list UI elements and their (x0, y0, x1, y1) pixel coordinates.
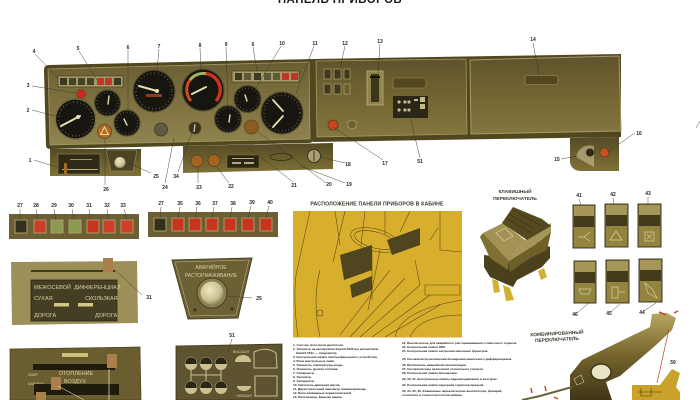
dash in perspective (340, 228, 420, 298)
gray plug (154, 123, 168, 136)
switch tile numbers: 42 (610, 192, 616, 198)
leader lines and callout numbers: 2 (27, 108, 30, 114)
switch strip: 27,35-40: 27 (158, 201, 164, 207)
illustration: rocker switch (480, 207, 551, 301)
leader lines and callout numbers: 15 (554, 157, 560, 163)
gauge: clock (261, 92, 303, 134)
switch tile numbers (572, 191, 656, 318)
panel: gear shift plate (176, 333, 282, 400)
text block: legend left column: 10. Указатель давления масла. (293, 383, 340, 387)
switch tile numbers: 44 (639, 310, 645, 316)
illustration: yellow terminal block (632, 360, 680, 400)
panel: right sub-panel (570, 137, 619, 171)
text block: legend right column: 27. Сигнализаторы включения стояночного тормоза. (402, 367, 484, 371)
icon: hazard button (98, 124, 112, 138)
switch strip: 27,35-40: 38 (230, 201, 236, 207)
switch strip: 27,35-40: 37 (212, 201, 218, 207)
slider thirteen (367, 71, 383, 105)
leader lines and callout numbers: 24 (162, 185, 168, 191)
knob eighteen (308, 150, 320, 162)
gauge: small five (94, 90, 120, 116)
leader lines and callout numbers: 18 (345, 162, 351, 168)
mark at right edge (696, 121, 700, 128)
leader lines and callout numbers: 19 (346, 182, 352, 188)
icon on rocker (496, 228, 513, 241)
switch tile 41 (573, 205, 595, 248)
lower body (484, 240, 550, 287)
text block: legend right column: отопителя и стеклоочистителя кабины. (402, 393, 463, 397)
gauge: tachometer (56, 99, 96, 139)
handle (393, 78, 426, 88)
heading: combined switch: КОМБИНИРОВАННЫЙ (530, 328, 584, 338)
text block: legend right column: 26. Включатель аварийной сигнализации. (402, 363, 467, 367)
panel: emergency release plate: РАСТОРМАЖИВАНИЕ (185, 273, 238, 279)
panel: instrument cluster (44, 59, 313, 149)
text block: legend left column: КамАЗ-5511 — спидометр). (296, 351, 337, 355)
gauge: small six (114, 110, 140, 136)
leader lines and callout numbers: 25 (153, 174, 159, 180)
heading: combined switch: ПЕРЕКЛЮЧАТЕЛЬ (535, 336, 580, 344)
text block: legend left column: 6. Указатель уровня топлива. (293, 367, 338, 371)
panel: emergency release plate: 25 (256, 296, 262, 302)
panel: differential plate: ДОРОГА (95, 313, 117, 319)
switch strip: 27-33 (9, 203, 139, 239)
illustration: combined stalk switch (522, 311, 678, 400)
heading: combined switch (530, 328, 584, 344)
panel: differential plate: СУХАЯ (34, 296, 53, 302)
switch tile 42 (605, 204, 628, 247)
panel: gear shift plate: 51 (229, 333, 235, 339)
text block: legend left column: 4. Блок контрольных ламп. (293, 359, 335, 363)
switches twelve (324, 69, 350, 94)
text block: legend right column: 25. Сигнализатор включения блокировки межосевого дифференциала. (402, 357, 512, 361)
orange knob (244, 120, 258, 134)
heading: rocker switch: ПЕРЕКЛЮЧАТЕЛЬ (493, 196, 537, 202)
leader lines and callout numbers: 16 (636, 131, 642, 137)
terminals (492, 268, 547, 301)
leader lines and callout numbers: 22 (228, 184, 234, 190)
leader lines and callout numbers (27, 37, 642, 193)
leader lines and callout numbers: 11 (312, 41, 318, 47)
panel: gear shift plate: ВЫСШАЯ (233, 350, 249, 354)
switch strip: 27-33: 30 (68, 203, 74, 209)
leader lines and callout numbers: 9 (225, 42, 228, 48)
rocker light face (483, 223, 525, 260)
panel: differential plate: 31 (146, 295, 152, 301)
text block: legend left column: 1. Счетчик моточасов двигателя. (293, 343, 344, 347)
leader lines and callout numbers: 14 (530, 37, 536, 43)
text block: legend left column: 8. Тахометр. (293, 375, 312, 379)
latch (270, 154, 292, 160)
panel: emergency release plate: АВАРИЙНОЕ (195, 263, 227, 271)
text block: legend left column (293, 343, 379, 399)
ignition key (189, 122, 201, 134)
text block: legend right column (402, 341, 517, 397)
icon: red warning lamp (76, 89, 86, 99)
gauge: ten (234, 86, 261, 112)
switch strip: 27-33: 31 (86, 203, 92, 209)
text block: legend left column: 7. Спидометр. (293, 371, 315, 375)
leader lines and callout numbers: 20 (326, 182, 332, 188)
rocker dark ribbed face (502, 207, 551, 240)
text block: legend left column: 11. Двухстрелочный манометр пневмопривода. (293, 387, 367, 391)
switch tile numbers: 43 (645, 191, 651, 197)
gauge: colored dial (182, 69, 224, 111)
text block: legend left column: 13. Пепельница. Крышка ящика. (293, 395, 342, 399)
illustration: yellow terminal block: 59 (670, 360, 676, 366)
gauge: speedometer (133, 70, 175, 112)
panel: heating plate: ЗАКР (28, 372, 38, 377)
switch strip: left (58, 76, 123, 87)
leader lines and callout numbers: 23 (196, 185, 202, 191)
leader lines and callout numbers: 1 (29, 158, 32, 164)
switch tile 43 (638, 204, 661, 247)
switch tile numbers: 41 (576, 193, 582, 199)
text block: legend right column: 23. Контрольная лампа ЭФУ. (402, 345, 446, 349)
panel: heating plate (10, 347, 141, 400)
text block: legend right column: 32. Контрольная лампа перегрева тормозов прицепа. (402, 383, 484, 387)
leader lines and callout numbers: 13 (377, 39, 383, 45)
switch strip: 27,35-40: 36 (195, 201, 201, 207)
text block: legend left column: 9. Амперметр. (293, 379, 315, 383)
switch strip: 27,35-40 (148, 200, 278, 237)
leader lines and callout numbers: 10 (279, 41, 285, 47)
switch strip: 27,35-40: 35 (177, 201, 183, 207)
text block: legend left column: 5. Указатель температуры воды. (293, 363, 343, 367)
gauge: nine (214, 106, 242, 132)
orange buttons (191, 154, 220, 167)
switch tile 45 (606, 260, 629, 303)
leader lines and callout numbers: 21 (291, 183, 297, 189)
text block: legend left column: 2. Тахометр на автомобиле КамАЗ-5320 (на автомобиле (293, 347, 379, 351)
leader lines and callout numbers: 12 (342, 41, 348, 47)
ring (348, 120, 356, 129)
panel: differential plate: ДОРОГА (34, 313, 56, 319)
switch tile numbers: 46 (572, 312, 578, 318)
panel: heating plate: КАБИНА (28, 381, 44, 386)
red button seventeen (328, 120, 338, 130)
panel: differential plate: СКОЛЬЗКАЯ (85, 296, 118, 302)
panel: lower left sub-panel (50, 149, 141, 176)
heading: rocker switch: КЛАВИШНЫЙ (498, 187, 532, 195)
leader lines and callout numbers: 26 (103, 187, 109, 193)
text block: legend right column: 22. Выключатель для аварийного растормаживания стояночного тормоза. (402, 341, 517, 345)
leader lines and callout numbers: 6 (127, 45, 130, 51)
switch strip: right (232, 71, 299, 82)
leader lines and callout numbers: 3 (27, 83, 30, 89)
leader lines and callout numbers: 6 (252, 42, 255, 48)
switch strip: 27-33: 33 (120, 203, 126, 209)
switch strip: 27-33: 29 (51, 203, 57, 209)
text block: legend right column: 33, 34, 35, 36. Клавишные переключатели вентилятора, фонарей, (402, 389, 502, 393)
panel: lower center sub-panel (183, 143, 333, 173)
text block: legend right column: 29, 30, 31. Контрольные лампы падения давления в контурах. (402, 377, 498, 381)
text block: legend left column: 3. Контрольная лампа электрофакельного устройства. (293, 355, 378, 359)
panel: differential plate: ДИФФЕРЕНЦИАЛ (74, 285, 121, 291)
leader lines and callout numbers: 51 (417, 159, 423, 165)
handle fourteen (525, 76, 558, 84)
panel: differential plate: МЕЖОСЕВОЙ (34, 283, 71, 291)
leader lines and callout numbers: 7 (158, 44, 161, 50)
switch strip: 27-33: 28 (33, 203, 39, 209)
text block: legend right column: 24. Контрольная лампа засорения масляных фильтров. (402, 349, 488, 353)
rocker side face (480, 223, 551, 262)
switch strip: 27,35-40: 39 (249, 200, 255, 206)
leader lines and callout numbers: 8 (199, 43, 202, 49)
switch strip: 27-33: 32 (104, 203, 110, 209)
switch tile 44 (639, 259, 662, 302)
text block: legend right column: 28. Контрольная лампа блокировки. (402, 371, 458, 375)
panel: differential plate (11, 258, 152, 325)
leader lines and callout numbers: 17 (382, 161, 388, 167)
leader lines and callout numbers: 34 (173, 174, 179, 180)
plate one (58, 154, 100, 174)
plate twenty-one small (227, 155, 259, 168)
switch strip: 27-33: 27 (17, 203, 23, 209)
heading: rocker switch (493, 187, 537, 202)
plate twenty-five small (106, 150, 137, 171)
shift diagram plate small (393, 96, 428, 118)
leader lines and callout numbers: 4 (33, 49, 36, 55)
switch strip: 27,35-40: 40 (267, 200, 273, 206)
panel: right glovebox door (470, 56, 621, 134)
panel: heating plate: ВОЗДУХ (64, 379, 86, 385)
leader lines and callout numbers: 5 (77, 46, 80, 52)
switch tile numbers: 45 (606, 311, 612, 317)
panel: emergency release plate (172, 258, 262, 319)
panel: center section (313, 54, 621, 142)
switch tile 46 (574, 261, 596, 303)
heading: location in cabin: РАСПОЛОЖЕНИЕ ПАНЕЛИ ПРИБОРОВ В КАБИНЕ (310, 202, 444, 208)
panel: yellow cabin illustration (293, 211, 462, 338)
panel: heating plate: ОТОПЛЕНИЕ (59, 371, 94, 377)
panel: gear shift plate: НИЗШАЯ (236, 394, 252, 398)
text block: legend left column: 12. Блок клавишных переключателей. (293, 391, 352, 395)
